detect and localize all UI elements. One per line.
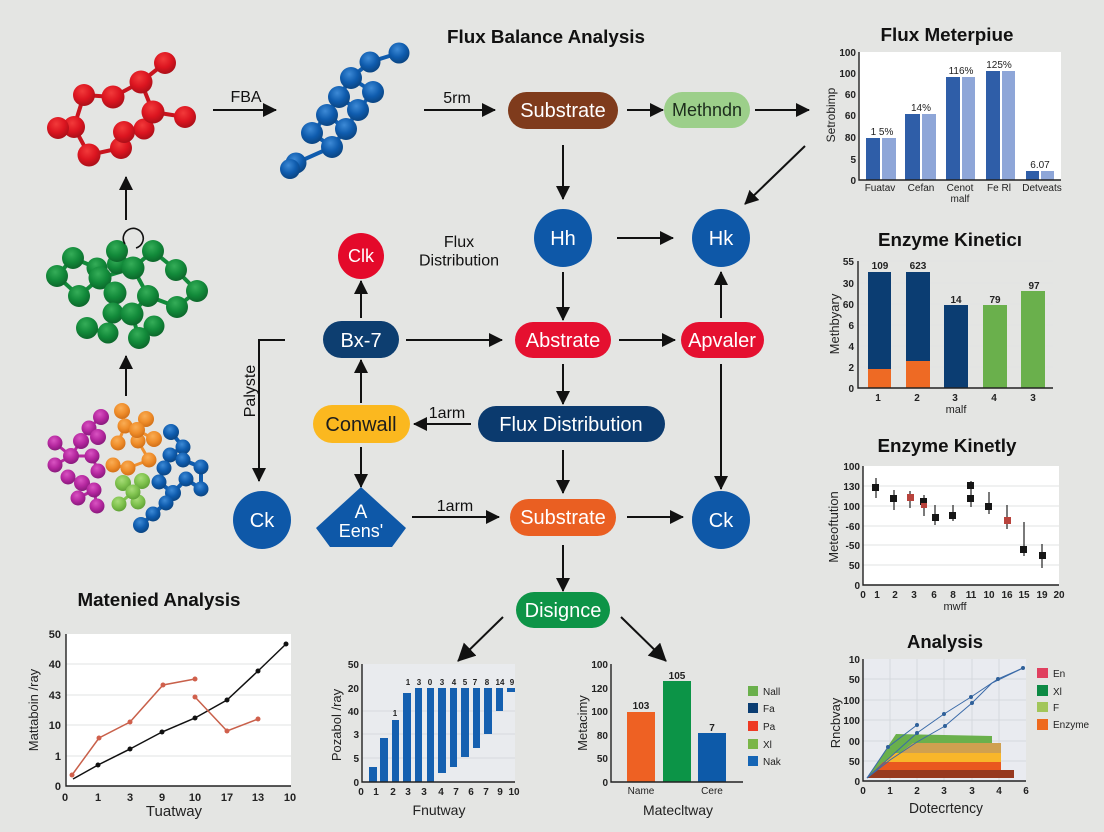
chart: Enzyme Kinetic: 97: [1028, 281, 1040, 292]
chart: Enzyme Kinetic: 30: [843, 279, 854, 290]
chart: Analysis: 4: [996, 786, 1002, 797]
chart: Fnutway bar chart: [329, 660, 520, 818]
chart: Analysis: 2: [914, 786, 920, 797]
chart: Enzyme Kinetic: 4: [991, 393, 997, 404]
chart: Enzyme Kinetly: 50: [849, 561, 860, 572]
label: 5rm: 5rm: [443, 90, 471, 107]
chart: Analysis: 00: [849, 737, 860, 748]
heading: Matenied Analysis: [78, 590, 240, 610]
arrow: chart to Hk: [745, 146, 805, 204]
icon: loop mark: [123, 228, 143, 248]
chart: Enzyme Kinetly: 3: [911, 590, 917, 601]
chart: Flux Meterpiue: Cenot: [947, 183, 974, 194]
node: Ck left: [233, 491, 291, 549]
chart: Matenied Analysis line chart: Mattaboin /ray: [26, 668, 41, 751]
chart: Fnutway bar chart: 50: [348, 660, 359, 671]
arrow: Abstrate to Flux Distribution: [562, 364, 564, 404]
chart: Enzyme Kinetic: 2: [848, 363, 854, 374]
arrow: cluster to green molecule: [125, 356, 127, 396]
chart: Enzyme Kinetly: 10: [983, 590, 995, 601]
chart: Matenied Analysis line chart: 13: [252, 792, 264, 804]
arrow: substrate to methndn: [627, 109, 663, 111]
chart: Enzyme Kinetic: 6: [848, 321, 854, 332]
arrow: methndn to chart: [755, 109, 809, 111]
legend: Enzyme: [1053, 720, 1090, 731]
chart: Fnutway bar chart: 8: [485, 678, 490, 687]
arrow: Conwall to A Eens: [360, 447, 362, 487]
chart: Fnutway bar chart: Pozabol /ray: [329, 688, 344, 761]
chart: Fnutway bar chart: 7: [483, 787, 489, 798]
chart: Flux Meterpiue: Fuatav: [865, 183, 895, 194]
arrow: substrate to Hh: [562, 145, 564, 199]
chart: Fnutway bar chart: 3: [405, 787, 411, 798]
arrow: Flux Distribution to Conwall: [414, 423, 471, 425]
node: Conwall: Conwall: [325, 414, 397, 436]
chart: Fnutway bar chart: 0: [353, 778, 359, 789]
arrow: FBA: [213, 109, 276, 111]
node: Clk: Clk: [348, 246, 375, 266]
chart: Enzyme Kinetly: -50: [846, 541, 860, 552]
chart: Matenied Analysis line chart: 0: [55, 781, 61, 793]
node: Ck right: Ck: [709, 510, 734, 532]
chart: Matenied Analysis line chart: 1: [55, 751, 61, 763]
arrow: green to red molecule: [125, 177, 127, 220]
heading: Enzyme Kineticı: [878, 230, 1022, 250]
chart: Enzyme Kinetly: 100: [843, 502, 860, 513]
icon: multicolour molecular cluster: [48, 403, 208, 533]
chart: Analysis: 0: [854, 777, 860, 788]
chart: Fnutway bar chart: 2: [390, 787, 396, 798]
chart: Enzyme Kinetly: 16: [1001, 590, 1013, 601]
chart: Fnutway bar chart: 6: [468, 787, 474, 798]
chart: Analysis: 6: [1023, 786, 1029, 797]
chart: Analysis: 3: [969, 786, 975, 797]
chart: Flux Meterpiue: Fe Rl: [987, 183, 1011, 194]
chart: Fnutway bar chart: 4: [452, 678, 457, 687]
chart: Flux Meterpiue: 60: [845, 90, 856, 101]
chart: Matecltway bar chart: [575, 660, 782, 818]
chart: Matecltway bar chart: 100: [591, 707, 608, 718]
node: Conwall: [313, 405, 410, 443]
chart: Matenied Analysis line chart: 10: [49, 720, 61, 732]
node: Methndn: [664, 92, 750, 128]
chart: Flux Meterpiue: Setrobimp: [824, 87, 838, 142]
arrow: Hh to Hk: [617, 237, 673, 239]
chart: Fnutway bar chart: 3: [421, 787, 427, 798]
arrow: Abstrate to Apvaler: [619, 339, 675, 341]
label: 1arm upper: 1arm: [429, 405, 465, 422]
arrow: 5rm to substrate: [424, 109, 495, 111]
legend: [1037, 668, 1090, 731]
chart: Flux Meterpiue: 100: [839, 48, 856, 59]
chart: Matenied Analysis line chart: 0: [62, 792, 68, 804]
chart: Matecltway bar chart: Name: [628, 786, 655, 797]
node: Ck right: [692, 491, 750, 549]
chart: Fnutway bar chart: 9: [497, 787, 503, 798]
node: A Eens: [316, 487, 406, 547]
node: Substrate brown: [508, 92, 618, 129]
chart: Enzyme Kinetic: [827, 230, 1053, 416]
chart: Enzyme Kinetic: 109: [872, 261, 889, 272]
chart: Enzyme Kinetly: 15: [1018, 590, 1030, 601]
chart: Enzyme Kinetic: 0: [848, 384, 854, 395]
chart: Fnutway bar chart: 7: [453, 787, 459, 798]
chart: Enzyme Kinetly: mwff: [943, 601, 967, 613]
label: 1arm lower: 1arm: [437, 498, 473, 515]
chart: Analysis: Dotecrtency: [909, 800, 983, 817]
chart: Matenied Analysis line chart: 10: [189, 792, 201, 804]
chart: Fnutway bar chart: 0: [358, 787, 364, 798]
chart: Matecltway bar chart: 103: [633, 701, 650, 712]
arrow: Hh to Abstrate: [562, 272, 564, 320]
chart: Fnutway bar chart: 10: [508, 787, 520, 798]
chart: Fnutway bar chart: 1: [373, 787, 379, 798]
chart: Enzyme Kinetly: [826, 436, 1065, 613]
chart: Matecltway bar chart: Cere: [701, 786, 723, 797]
chart: Matenied Analysis line chart: 40: [49, 659, 61, 671]
node: Abstrate: Abstrate: [526, 330, 600, 352]
chart: Analysis: 100: [843, 696, 860, 707]
chart: Enzyme Kinetly: Meteoftution: [826, 491, 841, 563]
chart: Enzyme Kinetic: 623: [910, 261, 927, 272]
arrow: Apvaler to Hk: [720, 272, 722, 318]
chart: Enzyme Kinetic: malf: [946, 404, 967, 416]
legend: F: [1053, 703, 1059, 714]
chart: Enzyme Kinetic: 3: [1030, 393, 1036, 404]
chart: Flux Meterpiue: 14%: [911, 103, 931, 114]
chart: Matenied Analysis line chart: 1: [95, 792, 101, 804]
chart: Matecltway bar chart: 100: [591, 660, 608, 671]
node: Hh: Hh: [550, 228, 576, 250]
chart: Matenied Analysis line chart: 50: [49, 629, 61, 641]
chart: Enzyme Kinetic: 4: [848, 342, 854, 353]
node: A Eens: Eens': [339, 521, 383, 541]
chart: Matenied Analysis line chart: 17: [221, 792, 233, 804]
node: Bx-7: Bx-7: [340, 330, 382, 352]
chart: Fnutway bar chart: 5: [463, 678, 468, 687]
chart: Enzyme Kinetic: 14: [950, 295, 962, 306]
legend: En: [1053, 669, 1065, 680]
node: Clk: [338, 233, 384, 279]
chart: Analysis: 0: [860, 786, 866, 797]
arrow: Apvaler to Ck: [720, 364, 722, 489]
chart: Enzyme Kinetic: 2: [914, 393, 920, 404]
icon: red molecule: [47, 52, 196, 166]
arrow: Bx-7 to Clk: [360, 281, 362, 318]
label: Flux Distribution: Distribution: [419, 252, 499, 270]
node: Abstrate: [515, 322, 611, 358]
arrow: Palyste bracket to Ck: [259, 340, 285, 481]
chart: Fnutway bar chart: 5: [353, 754, 359, 765]
chart: Enzyme Kinetly: 11: [966, 590, 977, 601]
chart: Enzyme Kinetic: 3: [952, 393, 958, 404]
chart: Fnutway bar chart: 3: [417, 678, 422, 687]
node: Hh: [534, 209, 592, 267]
node: Flux Distribution: [478, 406, 665, 442]
chart: Matenied Analysis line chart: 10: [284, 792, 296, 804]
chart: Analysis: [828, 632, 1090, 817]
chart: Analysis: 10: [849, 655, 860, 666]
chart: Enzyme Kinetly: 1: [874, 590, 880, 601]
node: A Eens: A: [355, 502, 368, 523]
arrow: Conwall to Bx-7: [360, 360, 362, 403]
chart: Matecltway bar chart: 0: [602, 778, 608, 789]
node: Apvaler: [681, 322, 764, 358]
chart: Flux Meterpiue: [824, 25, 1062, 205]
legend: Xl: [1053, 687, 1062, 698]
chart: Analysis: 100: [843, 716, 860, 727]
chart: Fnutway bar chart: 4: [438, 787, 444, 798]
chart: Matecltway bar chart: 120: [591, 684, 608, 695]
node: Hk: [692, 209, 750, 267]
node: Disignce: [516, 592, 610, 628]
chart: Enzyme Kinetly: 6: [931, 590, 937, 601]
chart: Flux Meterpiue: 116%: [949, 66, 974, 77]
chart: Matecltway bar chart: 80: [597, 731, 608, 742]
node: Substrate brown: Substrate: [520, 100, 606, 122]
chart: Analysis: 3: [941, 786, 947, 797]
chart: Matecltway bar chart: Metacimy: [575, 695, 590, 751]
chart: Analysis: 1: [887, 786, 893, 797]
chart: Fnutway bar chart: 1: [393, 709, 398, 718]
chart: Flux Meterpiue: malf: [951, 194, 970, 205]
chart: Enzyme Kinetic: 79: [989, 295, 1001, 306]
legend: Pa: [763, 722, 776, 733]
chart: Flux Meterpiue: 125%: [986, 60, 1012, 71]
chart: Analysis: 50: [849, 757, 860, 768]
node: Substrate orange: [510, 499, 616, 536]
chart: Flux Meterpiue: 80: [845, 133, 856, 144]
chart: Flux Meterpiue: Cefan: [908, 183, 934, 194]
chart: Enzyme Kinetly: 0: [860, 590, 866, 601]
chart: Flux Meterpiue: Detveats: [1022, 183, 1062, 194]
label: Palyste: Palyste: [242, 365, 259, 417]
chart: Fnutway bar chart: 7: [473, 678, 478, 687]
chart: Fnutway bar chart: 20: [348, 684, 359, 695]
chart: Flux Meterpiue: 1 5%: [871, 127, 894, 138]
chart: Matecltway bar chart: Matecltway: [643, 802, 713, 818]
chart: Matecltway bar chart: 50: [597, 754, 608, 765]
chart: Analysis: 50: [849, 675, 860, 686]
chart: Enzyme Kinetic: 1: [875, 393, 881, 404]
chart: Enzyme Kinetly: 100: [843, 462, 860, 473]
chart: Enzyme Kinetly: 2: [892, 590, 898, 601]
chart: Flux Meterpiue: 100: [839, 69, 856, 80]
arrow: Disignce to bottom bar chart: [458, 617, 503, 661]
legend: Nall: [763, 687, 780, 698]
title: Flux Balance Analysis: [447, 27, 645, 47]
arrow: Substrate to Disignce: [562, 545, 564, 591]
chart: Matenied Analysis line chart: Tuatway: [146, 803, 203, 820]
chart: Flux Meterpiue: 0: [850, 176, 856, 187]
chart: Enzyme Kinetly: 20: [1053, 590, 1065, 601]
chart: Enzyme Kinetly: 8: [950, 590, 956, 601]
chart: Fnutway bar chart: 14: [496, 678, 505, 687]
node: Hk: Hk: [709, 228, 734, 250]
arrow: Flux Distribution to Substrate: [562, 450, 564, 493]
heading: Analysis: [907, 632, 983, 652]
chart: Enzyme Kinetic: 55: [843, 257, 854, 268]
label: FBA: FBA: [230, 89, 262, 106]
chart: Fnutway bar chart: 3: [353, 730, 359, 741]
chart: Fnutway bar chart: 0: [428, 678, 433, 687]
chart: Enzyme Kinetic: 60: [843, 300, 854, 311]
node: Apvaler: Apvaler: [688, 330, 756, 352]
legend: Fa: [763, 704, 775, 715]
heading: Enzyme Kinetly: [878, 436, 1016, 456]
node: Disignce: Disignce: [525, 600, 601, 622]
chart: Fnutway bar chart: 1: [406, 678, 411, 687]
arrow: A Eens to Substrate: [412, 516, 499, 518]
chart: Enzyme Kinetly: 19: [1036, 590, 1048, 601]
label: Flux Distribution: Flux: [444, 234, 474, 251]
legend: [748, 686, 782, 768]
chart: Enzyme Kinetly: -60: [846, 522, 860, 533]
chart: Enzyme Kinetly: 0: [854, 581, 860, 592]
node: Methndn: Methndn: [672, 100, 742, 120]
icon: green molecule: [46, 228, 208, 349]
node: Bx-7: [323, 321, 399, 358]
chart: Matecltway bar chart: 105: [669, 671, 686, 682]
node: Ck left: Ck: [250, 510, 275, 532]
node: Flux Distribution: Flux Distribution: [499, 414, 643, 436]
chart: Flux Meterpiue: 5: [850, 155, 856, 166]
node: Substrate orange: Substrate: [520, 507, 606, 529]
arrow: Disignce to metric chart: [621, 617, 666, 661]
chart: Matecltway bar chart: 7: [709, 723, 715, 734]
chart: Matenied Analysis line chart: 9: [159, 792, 165, 804]
chart: Matenied Analysis line chart: 43: [49, 690, 61, 702]
chart: Fnutway bar chart: 9: [510, 678, 515, 687]
chart: Flux Meterpiue: 60: [845, 111, 856, 122]
chart: Fnutway bar chart: Fnutway: [413, 802, 465, 818]
chart: Analysis: Rncbvay: [828, 697, 843, 748]
arrow: Substrate to Ck: [627, 516, 683, 518]
chart: Enzyme Kinetic: Methbyary: [827, 293, 842, 354]
chart: Fnutway bar chart: 3: [440, 678, 445, 687]
chart: Matenied Analysis line chart: [26, 590, 296, 820]
chart: Flux Meterpiue: 6.07: [1030, 160, 1050, 171]
heading: Flux Meterpiue: [880, 25, 1014, 45]
chart: Fnutway bar chart: 40: [348, 707, 359, 718]
legend: Xl: [763, 740, 772, 751]
arrow: Bx-7 to Abstrate: [406, 339, 502, 341]
legend: Nak: [763, 757, 782, 768]
chart: Matenied Analysis line chart: 3: [127, 792, 133, 804]
chart: Enzyme Kinetly: 130: [843, 482, 860, 493]
icon: blue molecule: [280, 42, 410, 179]
